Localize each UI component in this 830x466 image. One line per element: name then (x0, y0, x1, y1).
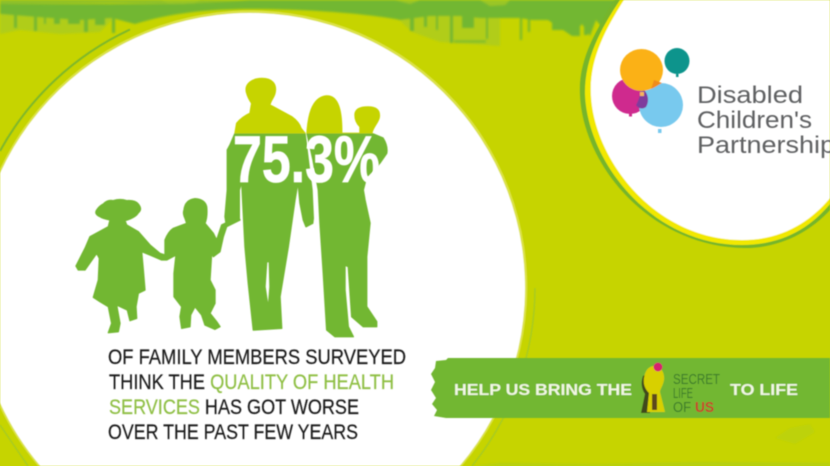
secret life of us wordmark (673, 371, 720, 416)
secret life of us wordmark: US (695, 399, 714, 416)
adults lower portion: green (224, 132, 388, 338)
icon: keyhole figure (641, 362, 665, 413)
secret life of us wordmark: OF (673, 399, 691, 416)
balloon: light blue (639, 83, 683, 133)
balloon: orange (620, 49, 663, 96)
logo wordmark: Children's (697, 107, 812, 134)
statistic caption: OVER THE PAST FEW YEARS (108, 420, 358, 444)
logo circle (580, 0, 830, 248)
banner background (431, 358, 830, 418)
background arc: lower left (0, 425, 28, 466)
secret life of us wordmark: SECRET (673, 371, 720, 388)
statistic 75.3%: 75.3% (233, 122, 380, 196)
statistic caption (108, 345, 406, 444)
background arc: lower right (472, 288, 535, 466)
secret life of us wordmark: LIFE (673, 385, 693, 402)
large white circle (0, 10, 527, 466)
background paint band: top (0, 0, 622, 46)
statistic caption: THINK THE QUALITY OF HEALTH (109, 370, 394, 394)
logo wordmark (697, 82, 830, 159)
adults upper portion: lime (234, 76, 381, 134)
balloon: magenta (612, 78, 648, 116)
girl and boy holding hands (76, 199, 240, 333)
logo balloons (612, 48, 690, 133)
statistic caption: SERVICES HAS GOT WORSE (109, 395, 359, 419)
logo wordmark: Partnership (697, 132, 830, 159)
family silhouette (76, 78, 387, 337)
balloon: teal (664, 48, 690, 77)
banner text left: HELP US BRING THE (454, 382, 632, 399)
background arc: upper left (0, 30, 130, 151)
logo wordmark: Disabled (697, 82, 803, 109)
statistic caption: OF FAMILY MEMBERS SURVEYED (108, 345, 406, 369)
background paint band: bottom (470, 424, 830, 466)
banner text right: TO LIFE (730, 382, 798, 399)
balloon overlap: purple (636, 86, 648, 108)
call to action banner (431, 358, 830, 418)
